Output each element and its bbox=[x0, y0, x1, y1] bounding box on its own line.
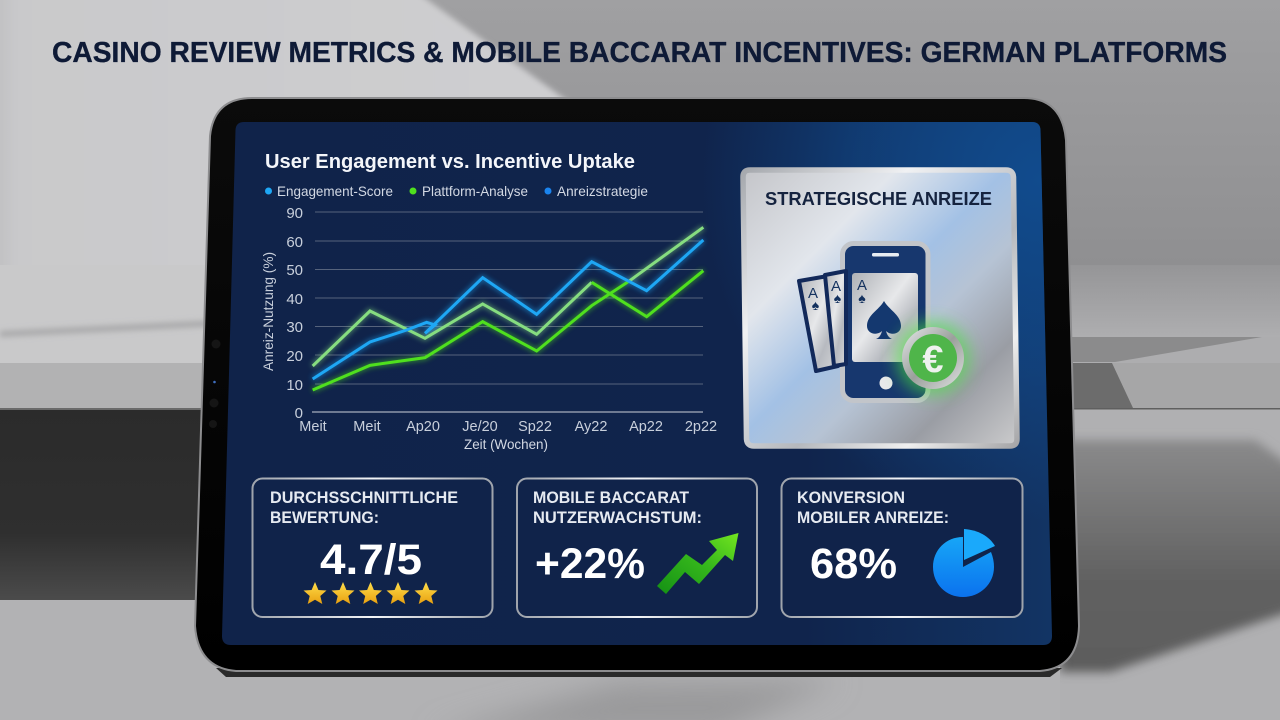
x axis labels: Meit bbox=[299, 419, 327, 435]
conversion label: KONVERSION bbox=[797, 488, 905, 507]
line: Plattform-Analyse lower bbox=[592, 271, 703, 317]
chart legend: Plattform-Analyse bbox=[422, 183, 528, 199]
conversion value: 68% bbox=[810, 540, 897, 588]
conversion label: MOBILER ANREIZE: bbox=[797, 508, 949, 527]
icon: smartphone: A bbox=[857, 277, 867, 294]
panel: line chart bbox=[260, 151, 717, 452]
line: upper green end bbox=[628, 227, 703, 282]
x axis labels: 2p22 bbox=[685, 419, 717, 435]
rating value: 4.7/5 bbox=[320, 536, 422, 584]
icon: playing cards bbox=[799, 271, 846, 371]
y axis labels: 30 bbox=[286, 319, 303, 336]
chart gridlines and axis bbox=[312, 212, 703, 412]
conversion label bbox=[797, 488, 949, 527]
icon: five stars bbox=[304, 582, 438, 604]
icon: playing cards: ♠ bbox=[812, 297, 820, 313]
icon: playing cards: A bbox=[831, 278, 841, 295]
panel plate bbox=[743, 170, 1017, 446]
stat card: user growth bbox=[517, 478, 757, 617]
y axis labels: 60 bbox=[286, 234, 303, 251]
growth label bbox=[533, 488, 702, 527]
chart legend: Engagement-Score bbox=[277, 183, 393, 199]
y axis labels: 0 bbox=[295, 405, 303, 422]
rating label: DURCHSSCHNITTLICHE bbox=[270, 488, 458, 507]
x axis labels: Ap22 bbox=[629, 419, 663, 435]
y axis labels bbox=[286, 205, 303, 422]
y axis labels: 90 bbox=[286, 205, 303, 222]
stat card: average rating bbox=[252, 478, 492, 617]
icon: playing cards: ♠ bbox=[834, 290, 842, 306]
icon: pie chart bbox=[933, 529, 995, 597]
growth value: +22% bbox=[535, 540, 645, 588]
chart legend: Anreizstrategie bbox=[557, 183, 648, 199]
line: Anreizstrategie green bbox=[313, 282, 628, 390]
icon: smartphone bbox=[842, 244, 928, 400]
chart legend bbox=[265, 183, 648, 199]
data lines bbox=[313, 227, 703, 390]
tablet device bbox=[195, 98, 1079, 677]
line: Engagement-Score bbox=[313, 240, 703, 379]
y axis labels: 50 bbox=[286, 262, 303, 279]
growth label: MOBILE BACCARAT bbox=[533, 488, 690, 507]
x axis labels: Sp22 bbox=[518, 419, 552, 435]
x axis labels: Meit bbox=[353, 419, 381, 435]
y axis labels: 20 bbox=[286, 348, 303, 365]
y axis labels: 40 bbox=[286, 291, 303, 308]
icon: green arrow bbox=[657, 533, 738, 594]
y axis labels: 10 bbox=[286, 377, 303, 394]
rating label: BEWERTUNG: bbox=[270, 508, 379, 527]
icon: smartphone: ♠ bbox=[858, 290, 866, 306]
x axis labels: Ay22 bbox=[575, 419, 607, 435]
chart heading: User Engagement vs. Incentive Uptake bbox=[265, 151, 635, 173]
title: CASINO REVIEW METRICS & MOBILE BACCARAT INCENTIVES: GERMAN PLATFORMS bbox=[52, 37, 1227, 69]
y axis title: Anreiz-Nutzung (%) bbox=[260, 252, 276, 371]
tablet screen bbox=[222, 122, 1052, 645]
icon: euro coin bbox=[896, 321, 970, 395]
rating label bbox=[270, 488, 458, 527]
panel heading: STRATEGISCHE ANREIZE bbox=[765, 189, 992, 209]
line: Plattform-Analyse upper bbox=[313, 282, 592, 366]
x axis labels bbox=[299, 419, 717, 435]
stat card: conversion bbox=[782, 478, 1022, 617]
tablet camera dots bbox=[209, 340, 220, 428]
panel: strategische anreize bbox=[743, 170, 1017, 446]
x axis labels: Je/20 bbox=[462, 419, 498, 435]
growth label: NUTZERWACHSTUM: bbox=[533, 508, 702, 527]
x axis labels: Ap20 bbox=[406, 419, 440, 435]
x axis title: Zeit (Wochen) bbox=[464, 436, 548, 452]
icon: playing cards: A bbox=[808, 285, 818, 302]
icon: euro coin: € bbox=[922, 339, 944, 381]
